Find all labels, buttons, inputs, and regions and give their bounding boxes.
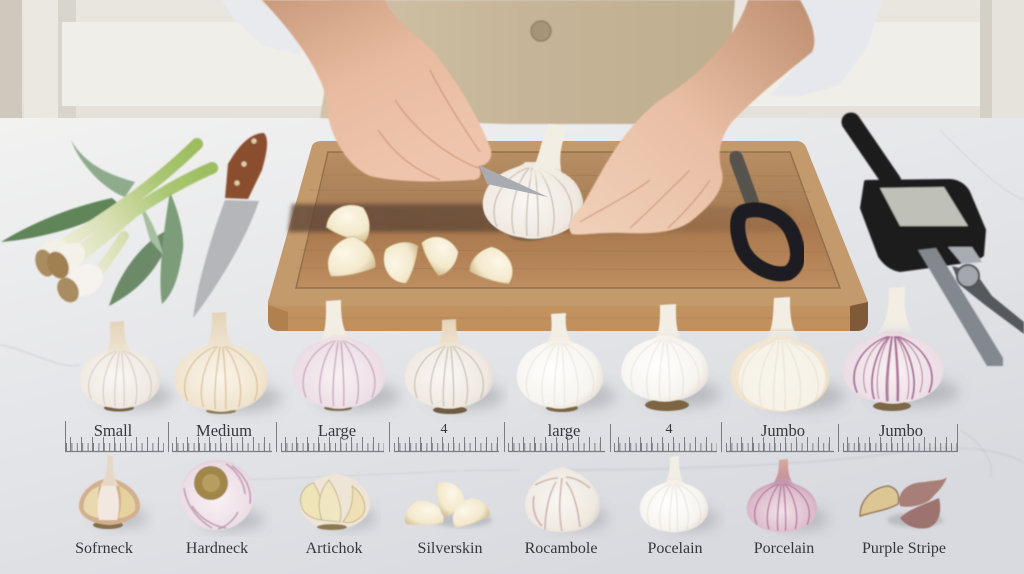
hardneck top view bulb <box>180 460 264 530</box>
device body <box>862 181 984 270</box>
cloves on board <box>322 198 519 287</box>
board juice groove and inner field <box>296 152 840 288</box>
row 2: garlic varieties <box>75 455 947 557</box>
background wall <box>0 0 1024 120</box>
variety labels: Porcelain <box>754 540 814 557</box>
bulb large pink <box>293 300 400 411</box>
chef knife <box>193 133 267 318</box>
bulb large white <box>517 313 616 412</box>
garlic bulb held on board <box>483 124 583 241</box>
black handle <box>851 122 892 182</box>
size labels: Small <box>94 421 133 440</box>
bulb 4 white <box>621 304 721 411</box>
pocelain white bulb <box>640 456 718 533</box>
steel ruler <box>918 248 1003 366</box>
variety labels: Purple Stripe <box>862 540 946 557</box>
person: shirt and arms <box>222 0 882 124</box>
left hand <box>262 0 491 181</box>
bulb jumbo purple <box>843 287 959 411</box>
bulb small <box>80 321 173 412</box>
variety labels: Rocambole <box>525 540 597 557</box>
size labels: 4 <box>666 422 672 437</box>
small paring knife <box>479 165 548 197</box>
size labels: Jumbo <box>879 421 923 440</box>
steel blade <box>952 266 1024 334</box>
size labels: Medium <box>196 421 252 440</box>
black oval tool on board <box>736 158 798 274</box>
device screen <box>880 187 968 226</box>
marble countertop <box>0 118 1024 574</box>
right hand <box>569 0 814 235</box>
row 1: bulbs by size <box>80 287 959 414</box>
artichoke cut bulb <box>300 474 376 530</box>
finger creases <box>378 70 710 228</box>
softneck cut bulb <box>79 455 148 529</box>
variety labels: Pocelain <box>647 540 703 557</box>
variety labels: Hardneck <box>186 540 248 557</box>
variety labels: Artichok <box>306 540 362 557</box>
porcelain pink bulb <box>747 459 828 533</box>
green garlic white bulbs <box>32 234 109 306</box>
stalks <box>58 144 212 280</box>
size labels <box>94 421 923 440</box>
bulb 4 <box>405 319 504 414</box>
cutting board <box>268 141 868 331</box>
dark wood band <box>288 204 796 232</box>
rocambole bulb <box>525 467 608 532</box>
silverskin cloves <box>405 478 492 530</box>
bulb medium <box>174 312 282 414</box>
variety labels: Sofrneck <box>75 540 133 557</box>
bulb jumbo white <box>731 297 845 412</box>
variety labels <box>75 540 946 557</box>
digital scale and measuring tool <box>851 122 1024 366</box>
size labels: Jumbo <box>761 421 805 440</box>
tan shirt <box>320 0 735 124</box>
left white sleeve <box>222 0 310 55</box>
purple stripe cloves <box>860 477 947 529</box>
shirt button <box>531 21 551 41</box>
size rulers <box>66 421 958 452</box>
size labels: large <box>548 421 580 440</box>
green garlic bunch and leaves <box>1 140 212 306</box>
size labels: Large <box>318 421 356 440</box>
leaves <box>1 140 183 306</box>
variety labels: Silverskin <box>418 540 482 557</box>
size labels: 4 <box>440 422 448 437</box>
right white sleeve <box>733 0 882 96</box>
